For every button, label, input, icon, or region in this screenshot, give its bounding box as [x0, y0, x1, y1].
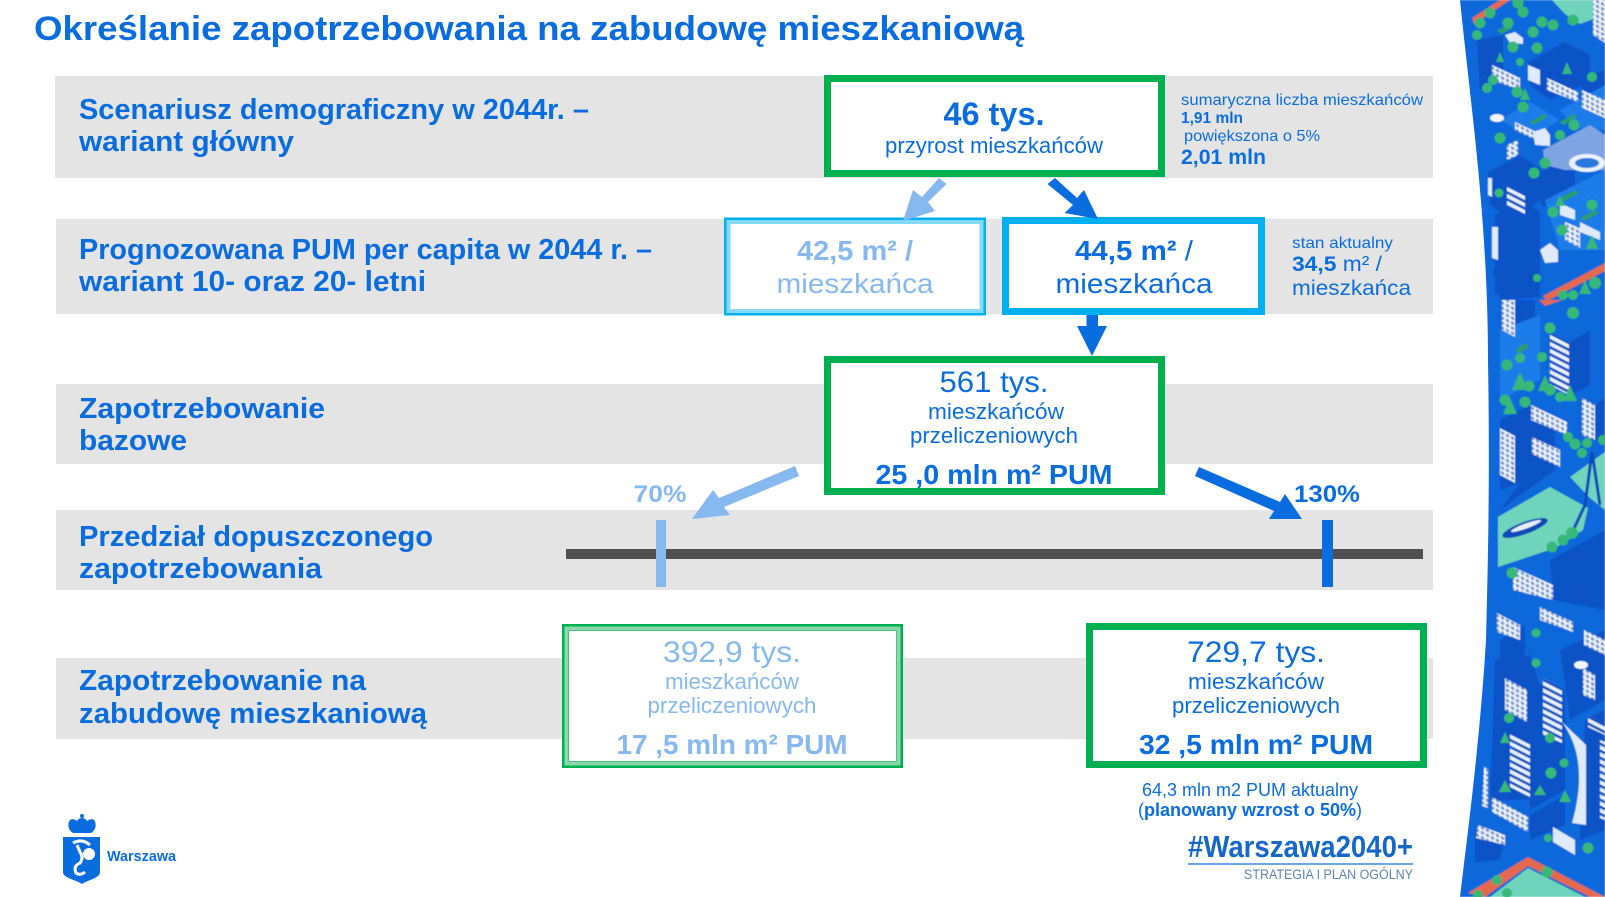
box: base demand: 561 tys.: [940, 366, 1048, 399]
box: lower demand: 17 ,5 mln m² PUM: [616, 729, 848, 760]
heading: housing demand: zabudowę mieszkaniową: [79, 698, 428, 730]
heading: allowed range: zapotrzebowania: [79, 553, 323, 585]
box: population growth: [828, 78, 1162, 174]
box: base demand: mieszkańców: [928, 399, 1064, 424]
box: 44.5 m2 variant: 44,5 m² /: [1075, 235, 1193, 266]
note: current state: [1292, 235, 1411, 300]
box: base demand: przeliczeniowych: [910, 423, 1078, 448]
chart: range bar with ticks: [566, 520, 1423, 587]
arrow: to main variant: [1048, 178, 1098, 219]
box: upper demand: mieszkańców: [1188, 669, 1324, 694]
logo: Warszawa coat of arms: Warszawa: [107, 849, 177, 865]
heading: base demand: [79, 393, 325, 457]
logo: Warszawa2040+: [1188, 829, 1413, 882]
box: 44.5 m2 variant: [1006, 220, 1262, 312]
box: base demand: [828, 360, 1162, 492]
heading: PUM per capita: Prognozowana PUM per capita w 2044 r. –: [79, 234, 652, 266]
arrow: to 130 percent: [1195, 467, 1302, 519]
heading: PUM per capita: wariant 10- oraz 20- letni: [78, 266, 426, 298]
note: planned increase: [1138, 780, 1362, 820]
panel: row backgrounds: [55, 76, 1433, 739]
note: total residents: powiększona o 5%: [1184, 128, 1320, 145]
box: 42.5 m2 variant: [727, 220, 983, 312]
box: lower demand: 392,9 tys.: [663, 636, 801, 669]
heading: housing demand: [79, 665, 428, 730]
logo: Warszawa2040+: #Warszawa2040+: [1188, 829, 1413, 864]
note: current state: 34,5 m² /: [1292, 253, 1382, 276]
note: current state: stan aktualny: [1292, 235, 1393, 252]
logo: Warszawa coat of arms: [63, 814, 177, 884]
heading: demographic scenario: [78, 94, 589, 158]
label: 130 percent: 130%: [1294, 481, 1360, 508]
heading: allowed range: Przedział dopuszczonego: [79, 521, 433, 553]
box: 42.5 m2 variant: mieszkańca: [776, 268, 934, 299]
arrow: to 70 percent: [692, 466, 799, 519]
box: population growth: 46 tys.: [944, 96, 1044, 132]
label: 70 percent: 70%: [634, 481, 686, 508]
note: total residents: 2,01 mln: [1181, 146, 1266, 169]
box: lower demand: przeliczeniowych: [648, 693, 816, 718]
box: population growth: przyrost mieszkańców: [885, 133, 1103, 158]
heading: base demand: Zapotrzebowanie: [79, 393, 325, 425]
box: upper demand: przeliczeniowych: [1172, 693, 1340, 718]
box: 44.5 m2 variant: mieszkańca: [1056, 268, 1213, 299]
box: upper demand: [1090, 626, 1424, 764]
note: planned increase: (planowany wzrost o 50%): [1138, 800, 1362, 820]
box: lower demand: mieszkańców: [665, 669, 799, 694]
note: total residents: [1181, 92, 1423, 169]
heading: allowed range: [79, 521, 433, 585]
logo: Warszawa2040+: STRATEGIA I PLAN OGÓLNY: [1244, 867, 1413, 882]
box: base demand: 25 ,0 mln m² PUM: [876, 459, 1112, 490]
box: upper demand: 729,7 tys.: [1187, 636, 1325, 669]
heading: housing demand: Zapotrzebowanie na: [79, 665, 367, 697]
heading: demographic scenario: Scenariusz demograficzny w 2044r. –: [79, 94, 589, 126]
arrow: to light variant: [903, 178, 946, 221]
heading: base demand: bazowe: [79, 425, 187, 457]
note: planned increase: 64,3 mln m2 PUM aktualny: [1142, 780, 1358, 800]
arrow: down to base demand: [1077, 315, 1107, 356]
panel: city illustration strip: [1450, 0, 1605, 897]
note: current state: mieszkańca: [1292, 277, 1411, 300]
note: total residents: 1,91 mln: [1181, 110, 1243, 127]
box: upper demand: 32 ,5 mln m² PUM: [1139, 729, 1373, 760]
note: total residents: sumaryczna liczba mieszkańców: [1181, 92, 1423, 109]
title: Określanie zapotrzebowania na zabudowę mieszkaniową: [34, 10, 1025, 48]
box: 42.5 m2 variant: 42,5 m² /: [797, 235, 913, 266]
heading: PUM per capita: [78, 234, 652, 298]
heading: demographic scenario: wariant główny: [78, 126, 294, 158]
box: lower demand: [566, 628, 900, 764]
